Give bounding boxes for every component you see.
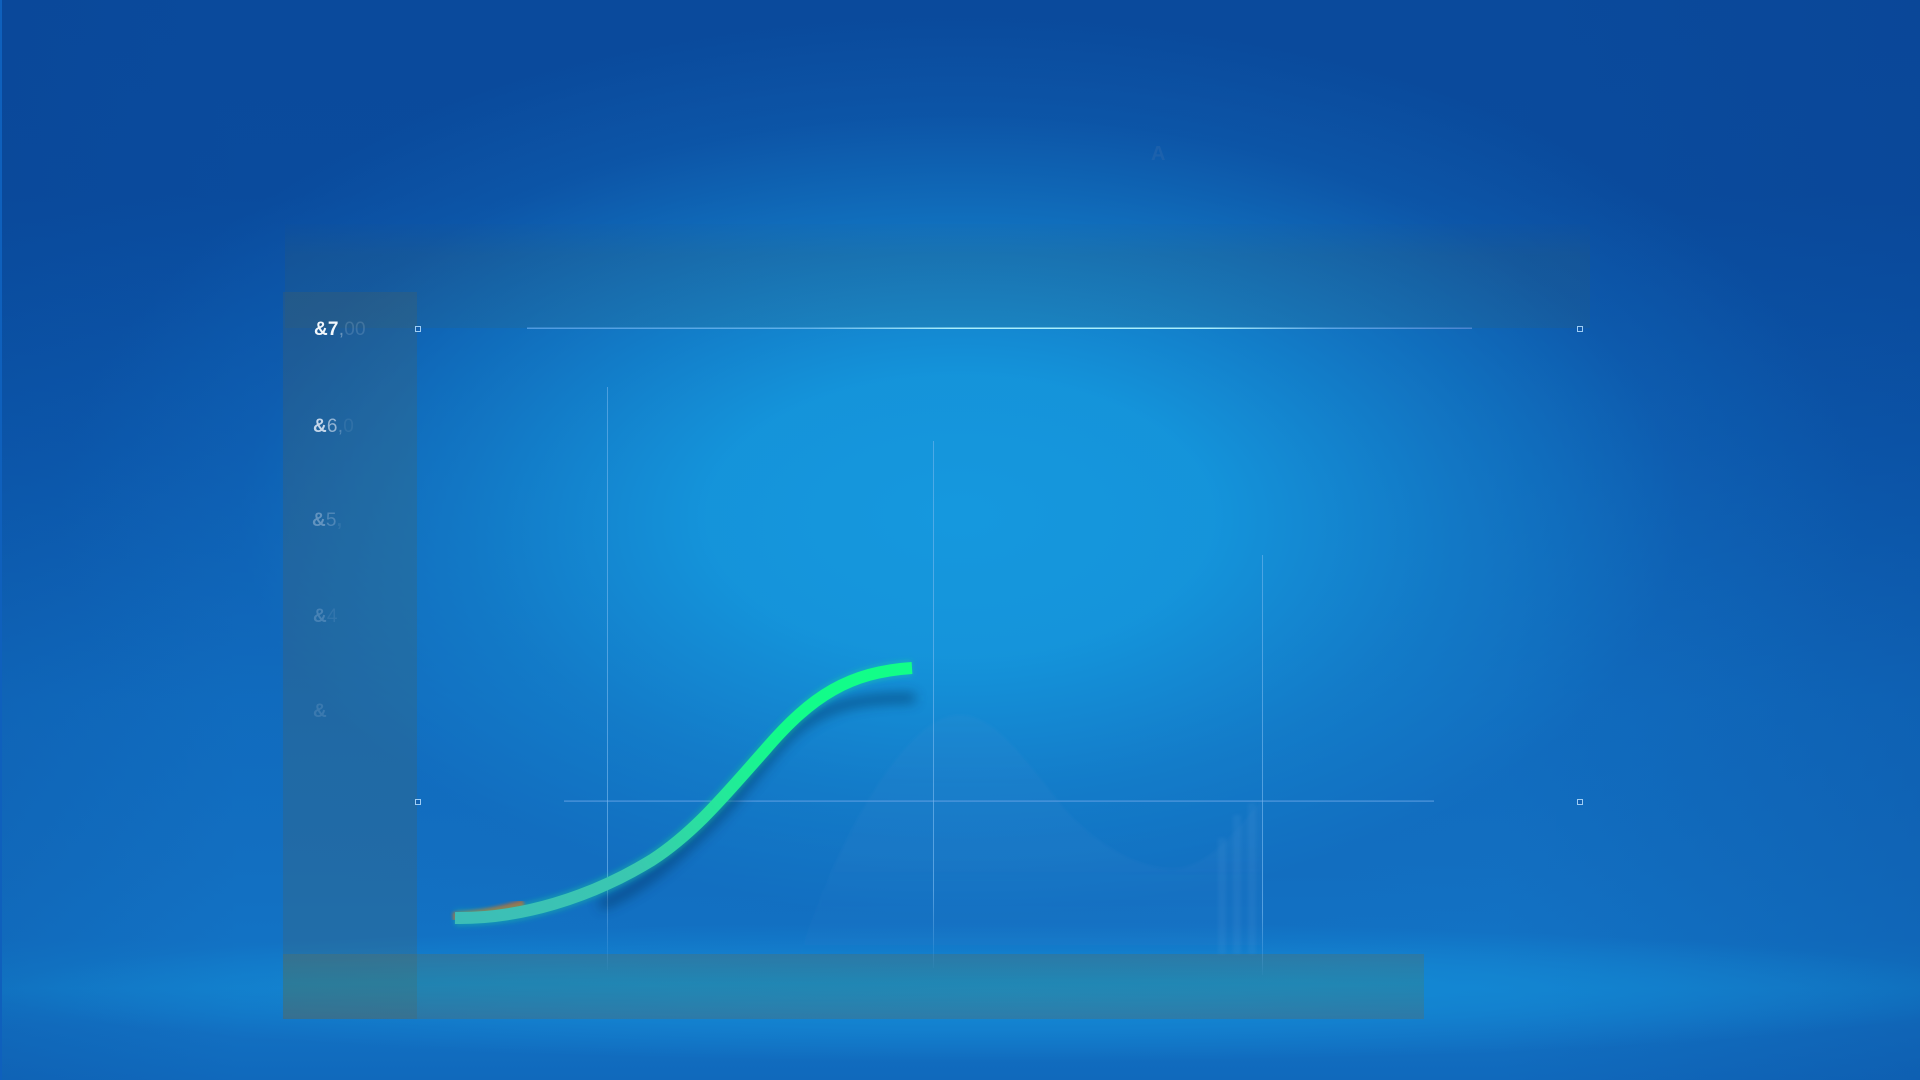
grid line: middle horizontal [564, 800, 1434, 802]
handle: mid right [1577, 799, 1583, 805]
grid line: vertical left [607, 387, 608, 970]
green growth curve [455, 668, 912, 918]
handle: top left [415, 326, 421, 332]
axis label: 3,000: & [313, 701, 327, 722]
panel: top band [285, 224, 1590, 328]
axis label: 4,000: &4 [313, 606, 338, 627]
handle: top right [1577, 326, 1583, 332]
grid line: vertical middle [933, 441, 934, 968]
grid line: top horizontal [527, 328, 1472, 329]
grid line: vertical right [1262, 555, 1263, 975]
curve glow [455, 668, 912, 918]
faint letter: A [1151, 143, 1165, 165]
axis label: 5,000: &5, [312, 510, 342, 531]
axis label: 6,000: &6,0 [313, 416, 354, 437]
faint background wave [800, 715, 1262, 954]
handle: mid left [415, 799, 421, 805]
panel: y-axis column [283, 292, 417, 1019]
orange secondary line [453, 904, 524, 917]
curve shadow [600, 698, 915, 905]
panel: x-axis band [283, 954, 1424, 1019]
axis label: 7,000: &7,00 [314, 319, 366, 340]
